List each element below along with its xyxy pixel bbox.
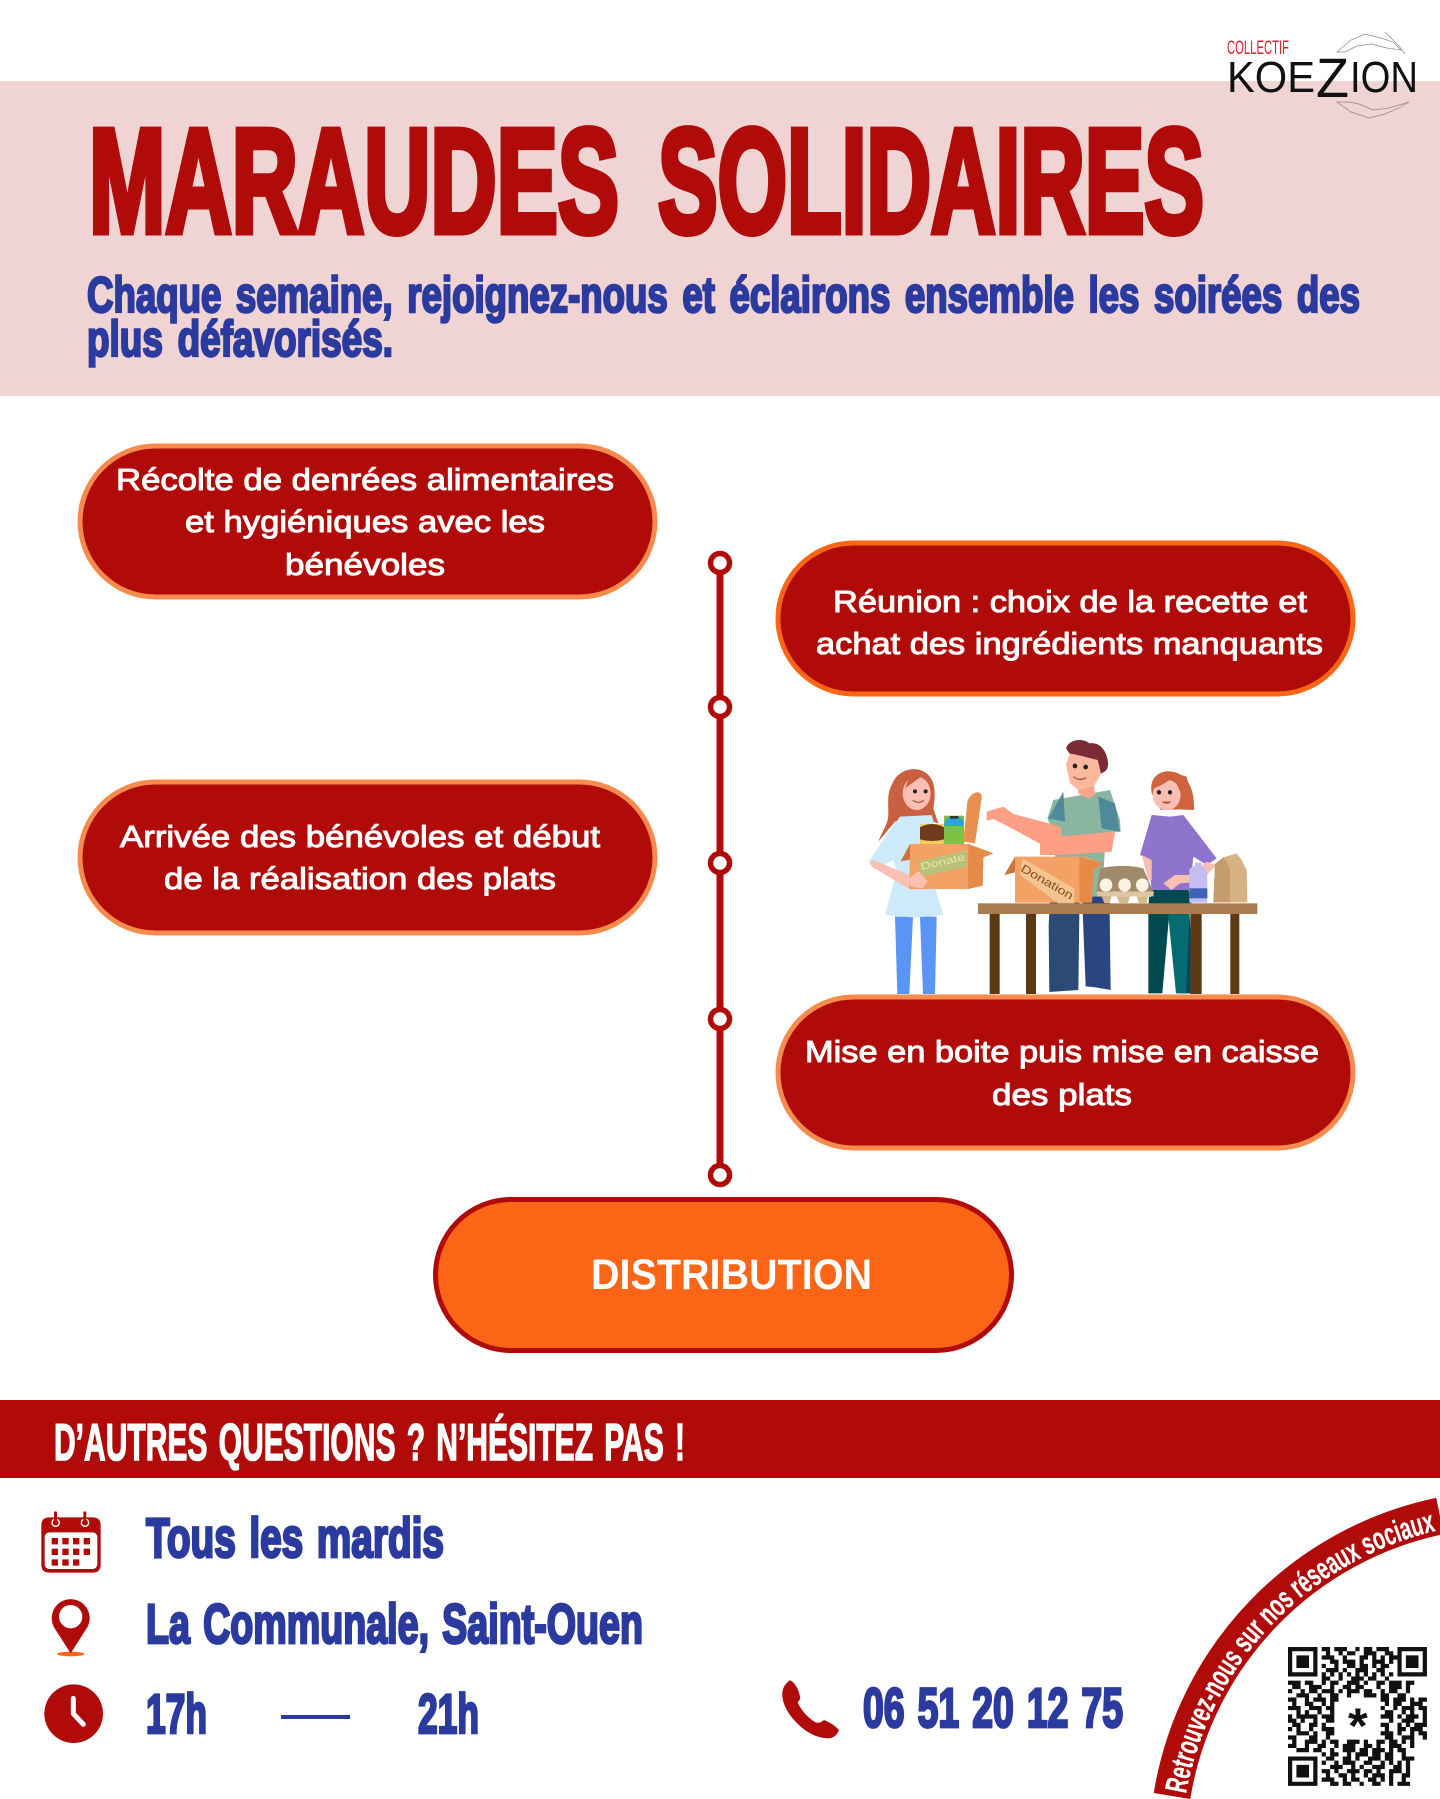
questions band [0, 1400, 1440, 1478]
timeline [710, 554, 730, 1184]
woman left: Donate [920, 852, 967, 873]
final pill: distribution: DISTRIBUTION [591, 1251, 872, 1299]
info: hours [146, 1682, 479, 1745]
logo: Collectif Koezion: KOE [1227, 53, 1315, 102]
icon: phone [782, 1680, 839, 1738]
man [987, 740, 1121, 992]
step pill: arrivée: de la réalisation des plats [164, 861, 556, 896]
woman right [1140, 771, 1247, 993]
man: Donation [1018, 863, 1075, 902]
info: phone number: 06 51 20 12 75 [863, 1676, 1123, 1739]
step pill: réunion: achat des ingrédients manquants [816, 626, 1323, 661]
step pill: mise en boite: des plats [992, 1077, 1132, 1112]
panel: header band [0, 81, 1440, 396]
step pill: arrivée [80, 782, 655, 933]
step pill: réunion [778, 543, 1353, 694]
step pill: réunion: Réunion : choix de la recette et [833, 584, 1307, 619]
woman left [868, 769, 993, 994]
logo: Collectif Koezion [1227, 32, 1418, 118]
egg carton [1097, 866, 1154, 903]
subtitle: plus défavorisés. [87, 311, 393, 367]
info: hours: 21h [418, 1682, 479, 1745]
curved banner: social networks: Retrouvez-nous sur nos réseaux sociaux [1165, 1514, 1436, 1793]
QR centre mark: * [1348, 1697, 1368, 1754]
final pill: distribution [436, 1200, 1012, 1350]
icon: calendar [41, 1511, 101, 1573]
step pill: collecte: et hygiéniques avec les [185, 504, 545, 539]
step pill: mise en boite: Mise en boite puis mise en caisse [805, 1034, 1319, 1069]
QR code [1288, 1647, 1427, 1786]
questions band: D’AUTRES QUESTIONS ? N’HÉSITEZ PAS ! [54, 1414, 685, 1472]
icon: location pin [52, 1599, 90, 1656]
logo: Collectif Koezion: ION [1350, 53, 1418, 102]
step pill: arrivée: Arrivée des bénévoles et début [120, 819, 600, 854]
info: place: La Communale, Saint-Ouen [146, 1592, 643, 1655]
step pill: collecte: bénévoles [285, 547, 445, 582]
step pill: mise en boite [778, 997, 1353, 1148]
step pill: collecte: Récolte de denrées alimentaires [116, 462, 614, 497]
logo: Collectif Koezion: Z [1316, 46, 1349, 109]
table [978, 903, 1257, 994]
info: day: Tous les mardis [146, 1506, 444, 1569]
step pill: collecte [80, 446, 655, 597]
title: MARAUDES [89, 99, 619, 264]
icon: clock [44, 1684, 103, 1743]
illustration: volunteers with donation boxes [868, 740, 1257, 994]
logo: Collectif Koezion: COLLECTIF [1227, 38, 1289, 59]
info: hours: 17h [146, 1682, 207, 1745]
